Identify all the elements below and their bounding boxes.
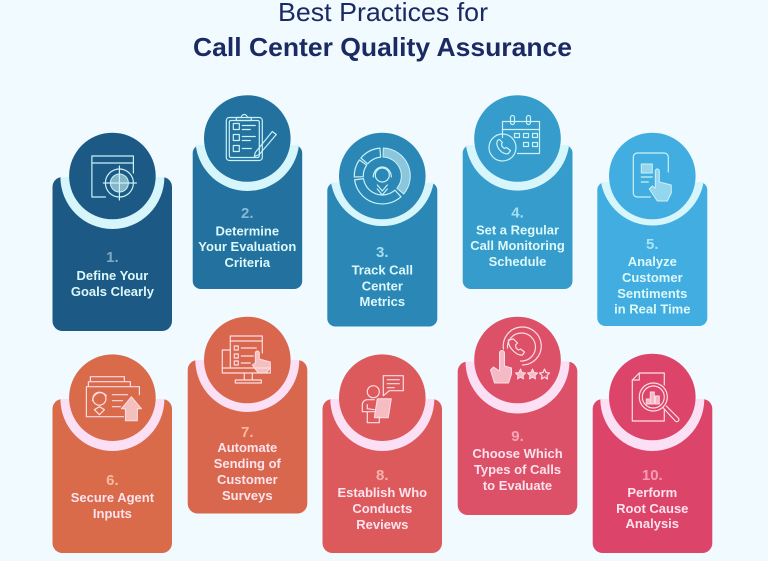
text: step 4: [470, 204, 565, 269]
card 4: monitoring schedule: [463, 95, 572, 289]
text: step 7: Automate: [217, 440, 277, 455]
text: step 9: [472, 428, 563, 493]
icon: monitor survey: [222, 336, 270, 383]
text: step 10: Analysis: [626, 516, 679, 531]
text: step 7: 7.: [241, 424, 254, 441]
text: step 5: in Real Time: [614, 302, 690, 316]
text: step 5: Analyze: [628, 254, 677, 269]
text: step 8: [338, 467, 427, 532]
icon: clipboard checklist: [226, 114, 276, 160]
text: step 10: Root Cause: [616, 501, 688, 516]
text: step 6: Secure Agent: [71, 490, 155, 505]
icon: reviewer with tablet: [362, 376, 403, 423]
text: step 7: [214, 424, 282, 503]
text: step 5: Sentiments: [617, 286, 687, 301]
text: step 1: Goals Clearly: [71, 284, 155, 299]
text: step 7: Sending of: [214, 456, 282, 471]
text: step 3: Center: [362, 278, 403, 294]
text: step 6: 6.: [106, 472, 119, 489]
text: step 4: Set a Regular: [476, 222, 559, 238]
text: step 5: Customer: [622, 270, 683, 285]
text: step 8: Establish Who: [338, 485, 427, 500]
text: step 5: [614, 236, 690, 316]
text: step 7: Surveys: [222, 488, 273, 503]
card 1: define your goals: [52, 133, 172, 331]
text: step 4: Schedule: [489, 254, 546, 269]
text: step 9: 9.: [511, 428, 524, 445]
icon: call rating: [490, 327, 550, 383]
icon: calendar with phone: [489, 116, 540, 161]
title: [193, 0, 572, 62]
text: step 7: Customer: [217, 472, 278, 487]
icon: agent dashboard: [354, 148, 410, 204]
text: step 9: to Evaluate: [483, 478, 552, 493]
text: step 6: [71, 472, 155, 521]
text: step 2: Criteria: [225, 255, 271, 270]
text: step 3: Track Call: [352, 262, 413, 278]
text: step 2: Your Evaluation: [198, 239, 296, 254]
text: step 2: 2.: [241, 205, 254, 222]
icon: agent card upload: [86, 377, 141, 421]
card 5: customer sentiments: [597, 133, 707, 326]
icon: tablet with hand: [633, 153, 671, 201]
text: step 8: 8.: [376, 467, 389, 484]
text: step 6: Inputs: [93, 506, 132, 521]
icon: browser target: [92, 156, 136, 200]
card 7: automate surveys: [188, 317, 307, 514]
card 8: who conducts reviews: [322, 354, 442, 553]
text: step 8: Conducts: [352, 501, 412, 516]
text: step 3: 3.: [376, 244, 389, 261]
text: step 10: [616, 467, 688, 531]
title: Call Center Quality Assurance: [193, 32, 572, 62]
text: step 1: 1.: [106, 249, 119, 266]
text: step 4: 4.: [511, 204, 524, 222]
card 6: agent inputs: [52, 354, 172, 553]
text: step 1: Define Your: [77, 268, 148, 283]
card 3: track metrics: [327, 133, 437, 326]
text: step 9: Choose Which: [472, 446, 563, 461]
icon: report magnifier: [632, 373, 679, 422]
text: step 5: 5.: [646, 236, 659, 253]
card 2: evaluation criteria: [193, 95, 302, 289]
text: step 9: Types of Calls: [474, 462, 561, 477]
text: step 1: [71, 249, 155, 299]
text: step 10: Perform: [627, 485, 677, 500]
text: step 2: [198, 205, 296, 270]
text: step 2: Determine: [216, 224, 279, 238]
text: step 3: [352, 244, 413, 309]
card 10: root cause analysis: [593, 354, 712, 553]
card 9: types of calls: [458, 317, 577, 515]
text: step 4: Call Monitoring: [470, 238, 565, 253]
text: step 8: Reviews: [356, 517, 408, 532]
text: step 3: Metrics: [360, 294, 405, 309]
text: step 10: 10.: [642, 467, 663, 484]
